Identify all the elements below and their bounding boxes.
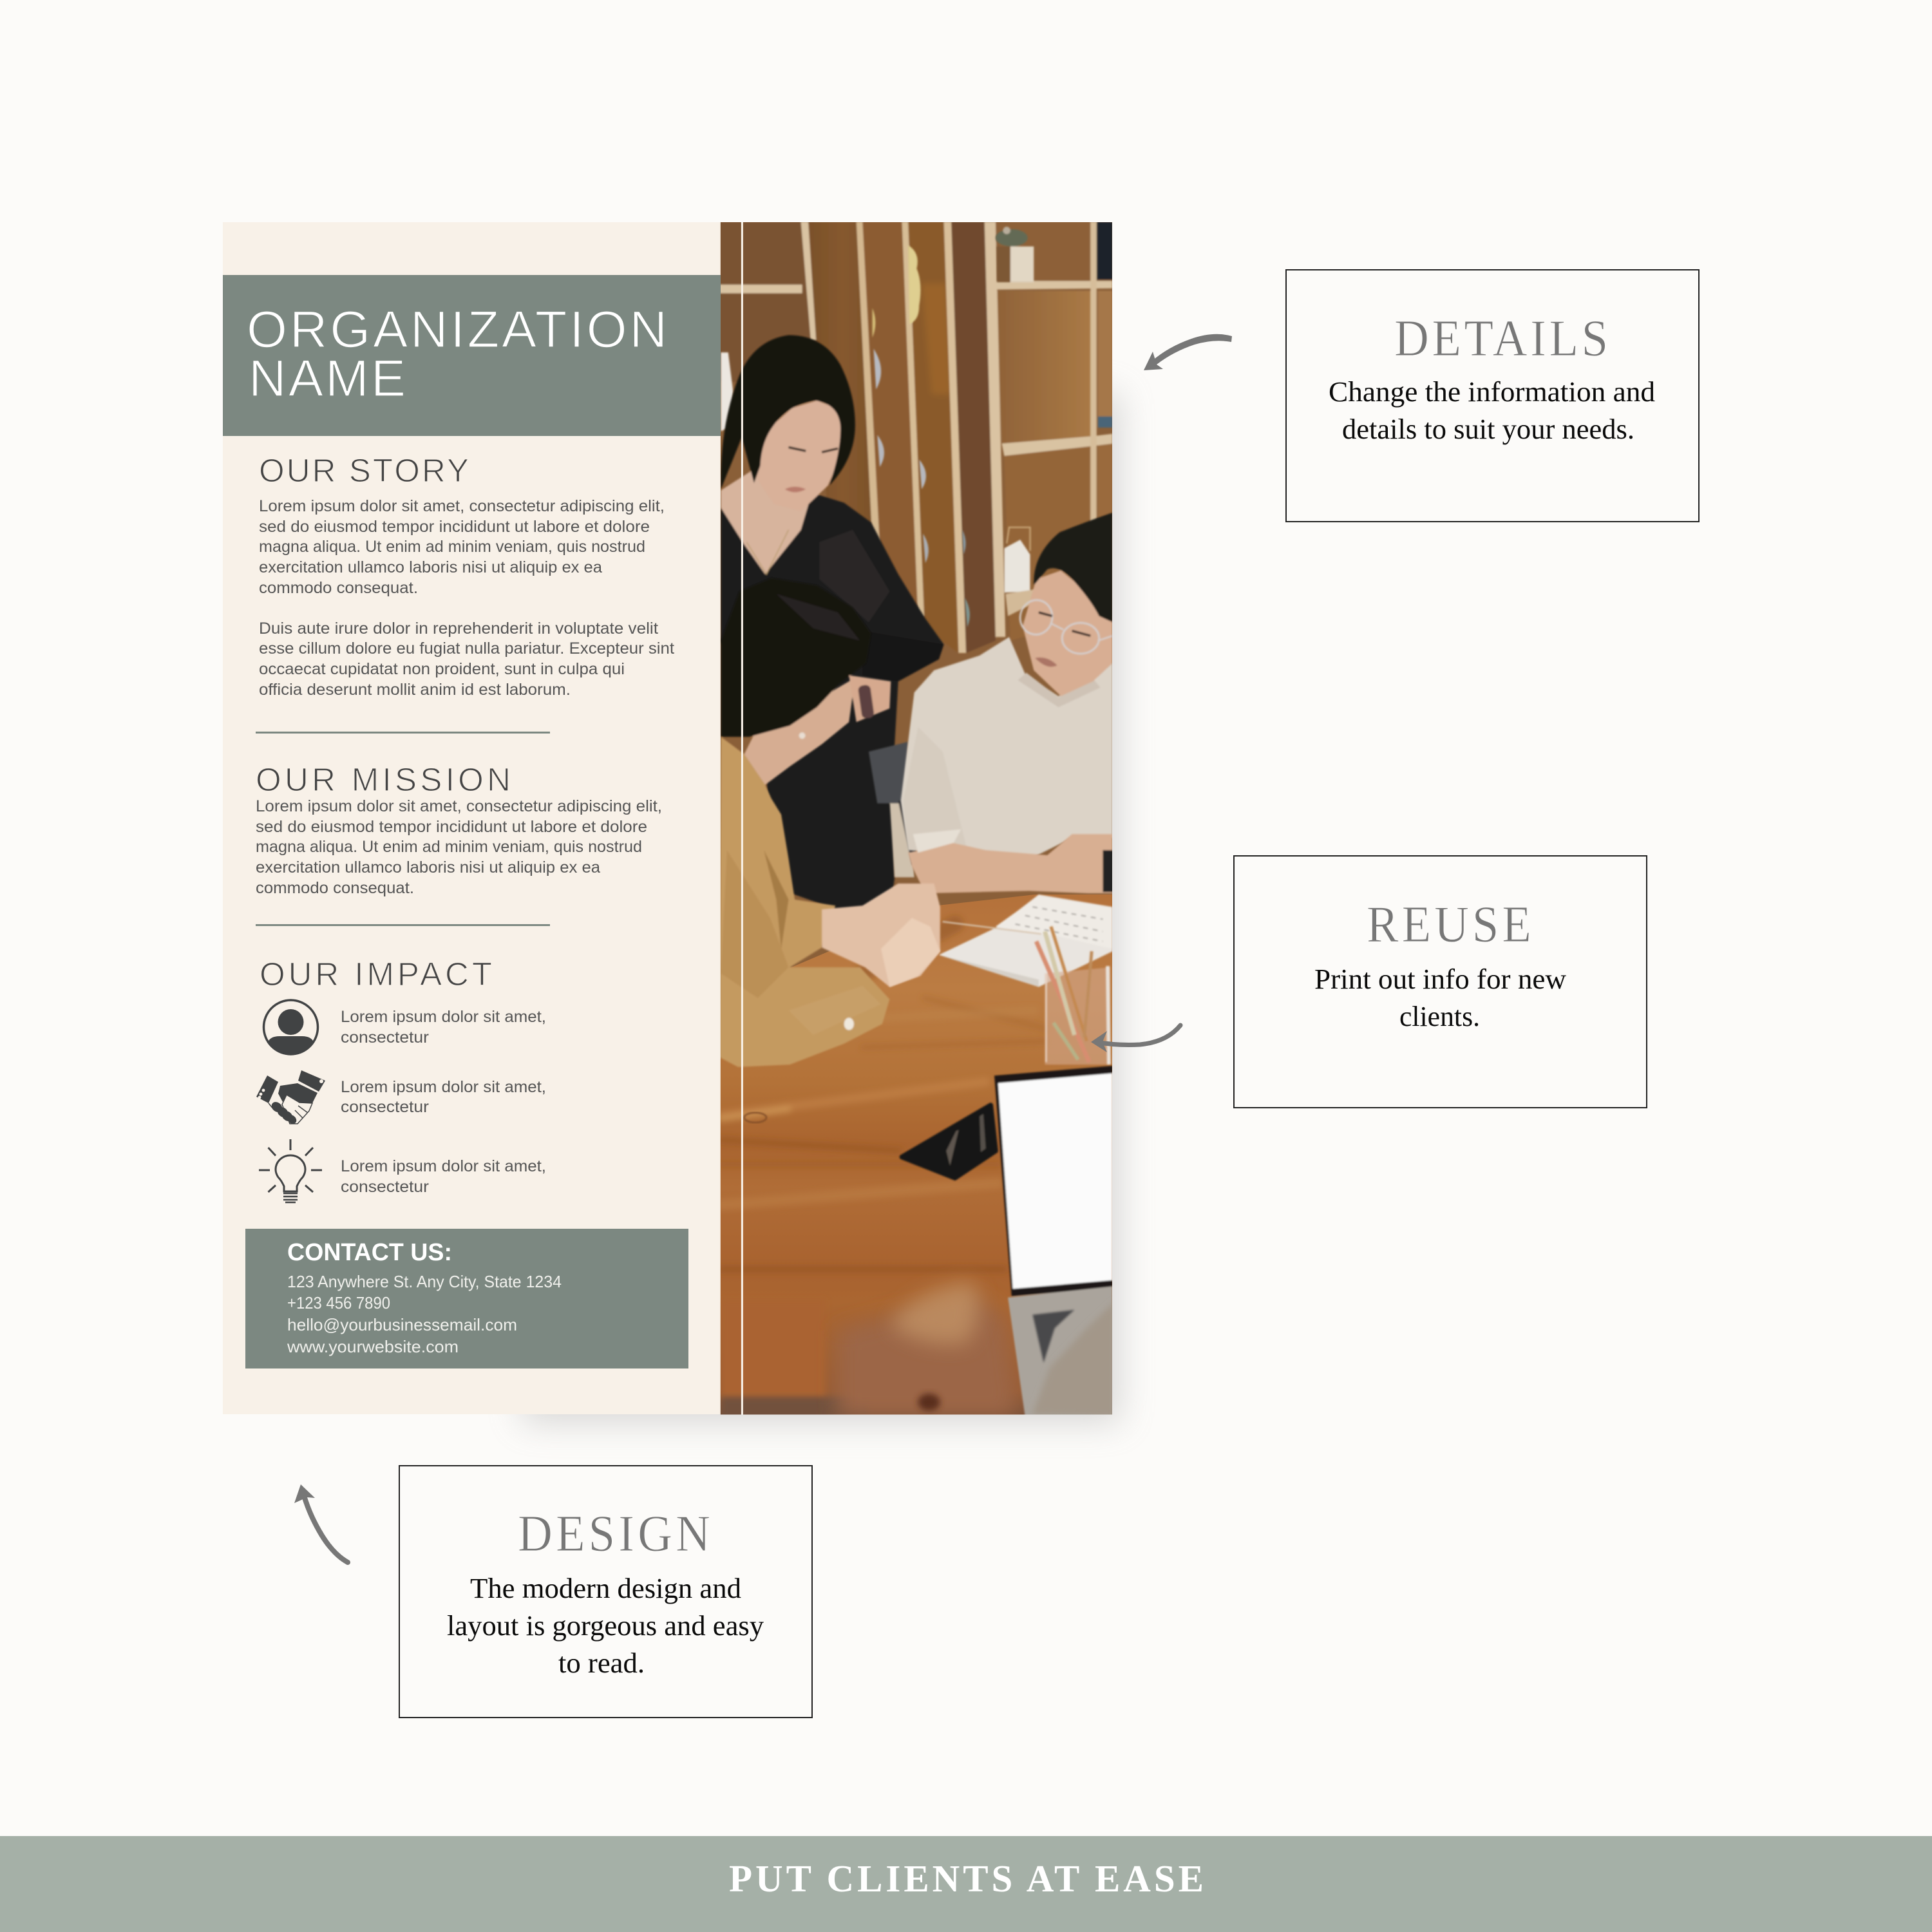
text: contact details: www.yourwebsite.com: [287, 1337, 459, 1356]
shelf posts and boards: [855, 222, 881, 541]
text: story paragraphs: esse cillum dolore eu fugiat nulla pariatur. Excepteur sint: [259, 639, 674, 658]
flyer drop shadow: [522, 393, 1121, 1423]
text: mission paragraph: exercitation ullamco laboris nisi ut aliquip ex ea: [256, 858, 600, 876]
heading: design: DESIGN: [518, 1504, 710, 1562]
callout: details: [1286, 270, 1699, 522]
smartphone: [902, 1105, 996, 1178]
heading: our story: OUR STORY: [259, 452, 469, 489]
text: design description: to read.: [558, 1647, 645, 1679]
panel: flyer: [223, 222, 1115, 1419]
text: impact item one: consectetur: [341, 1028, 429, 1046]
open notebook: [939, 895, 1113, 987]
text: contact details: hello@yourbusinessemail.com: [287, 1315, 517, 1334]
text: reuse description: [1314, 963, 1566, 1032]
text: mission paragraph: [256, 797, 662, 897]
text: story paragraphs: commodo consequat.: [259, 579, 418, 597]
text: story paragraphs: Lorem ipsum dolor sit amet, consectetur adipiscing elit,: [259, 497, 665, 515]
panel: contact us: [245, 1229, 688, 1368]
text: reuse description: Print out info for new: [1314, 963, 1566, 995]
section: our impact: [256, 956, 546, 1202]
footer title: PUT CLIENTS AT EASE: [729, 1857, 1204, 1900]
heading: organization name: [247, 301, 667, 408]
heading: details: DETAILS: [1394, 309, 1608, 367]
arrow: toward flyer from details: [1144, 334, 1232, 370]
text: mission paragraph: Lorem ipsum dolor sit amet, consectetur adipiscing elit,: [256, 797, 662, 815]
icon: handshake: [256, 1070, 325, 1126]
wooden table top: [719, 895, 1113, 1419]
text: impact item two: consectetur: [341, 1098, 429, 1116]
band: organization name: [223, 275, 721, 436]
section: our story: [259, 452, 674, 699]
photo: team meeting around a wooden table: [719, 222, 1115, 1419]
paper lantern balls: [873, 245, 970, 627]
text: design description: The modern design and: [470, 1573, 741, 1604]
text: impact item one: [341, 1008, 546, 1046]
text: reuse description: clients.: [1399, 1001, 1480, 1032]
text: story paragraphs: exercitation ullamco laboris nisi ut aliquip ex ea: [259, 558, 602, 576]
callout: design: [399, 1466, 812, 1718]
seated woman in tan blouse, back of head: [719, 578, 891, 1067]
text: mission paragraph: sed do eiusmod tempor incididunt ut labore et dolore: [256, 818, 647, 836]
seated man in white t-shirt: [901, 513, 1113, 858]
icon: light bulb: [259, 1139, 322, 1202]
wooden shelving: [719, 222, 1113, 653]
text: story paragraphs: Duis aute irure dolor in reprehenderit in voluptate velit: [259, 620, 658, 638]
icon: person in circle: [264, 1000, 318, 1054]
heading: reuse: REUSE: [1367, 895, 1531, 953]
white vase with handle: [1004, 527, 1037, 616]
text: design description: [447, 1573, 764, 1679]
heading: contact us: CONTACT US:: [287, 1239, 452, 1266]
text: contact details: +123 456 7890: [287, 1293, 390, 1312]
heading: our impact: OUR IMPACT: [260, 956, 492, 992]
text: impact item one: Lorem ipsum dolor sit amet,: [341, 1008, 546, 1026]
heading: our mission: OUR MISSION: [256, 761, 511, 798]
footer banner: [0, 1836, 1932, 1932]
arrow: toward flyer from reuse: [1091, 1025, 1180, 1052]
text: details description: [1329, 376, 1655, 445]
text: impact item three: consectetur: [341, 1178, 429, 1196]
text: story paragraphs: sed do eiusmod tempor incididunt ut labore et dolore: [259, 518, 650, 536]
text: mission paragraph: commodo consequat.: [256, 879, 414, 897]
text: story paragraphs: officia deserunt mollit anim id est laborum.: [259, 681, 571, 699]
arrow: toward flyer from design: [294, 1484, 348, 1562]
flyer cream text column: [223, 222, 721, 1414]
pencil cup: [1036, 927, 1110, 1065]
callout: reuse: [1234, 856, 1647, 1108]
text: story paragraphs: magna aliqua. Ut enim ad minim veniam, quis nostrud: [259, 538, 645, 556]
dark wooden chair: [869, 742, 918, 877]
text: mission paragraph: magna aliqua. Ut enim ad minim veniam, quis nostrud: [256, 838, 642, 856]
text: details description: Change the information and: [1329, 376, 1655, 408]
text: design description: layout is gorgeous and easy: [447, 1610, 764, 1642]
woman's hands: [822, 884, 940, 987]
laptop: [994, 1066, 1113, 1417]
text: impact item two: Lorem ipsum dolor sit amet,: [341, 1078, 546, 1096]
text: details description: details to suit your needs.: [1342, 413, 1634, 445]
man's forearm and hand: [908, 829, 1115, 893]
text: story paragraphs: occaecat cupidatat non proident, sunt in culpa qui: [259, 660, 625, 678]
text: contact details: [287, 1272, 562, 1356]
text: story paragraphs: [259, 497, 674, 699]
text: impact item three: Lorem ipsum dolor sit amet,: [341, 1157, 546, 1175]
text: contact details: 123 Anywhere St. Any City, State 1234: [287, 1272, 562, 1291]
standing woman in black blouse: [721, 335, 944, 914]
light object on left strip: [721, 352, 733, 431]
text: impact item three: [341, 1157, 546, 1196]
section: our mission: [256, 761, 662, 897]
thin white vertical line: [741, 222, 743, 1417]
heading: organization name: ORGANIZATION: [247, 301, 667, 359]
heading: organization name: NAME: [249, 350, 406, 408]
text: impact item two: [341, 1078, 546, 1116]
plant in white pot: [996, 227, 1034, 282]
